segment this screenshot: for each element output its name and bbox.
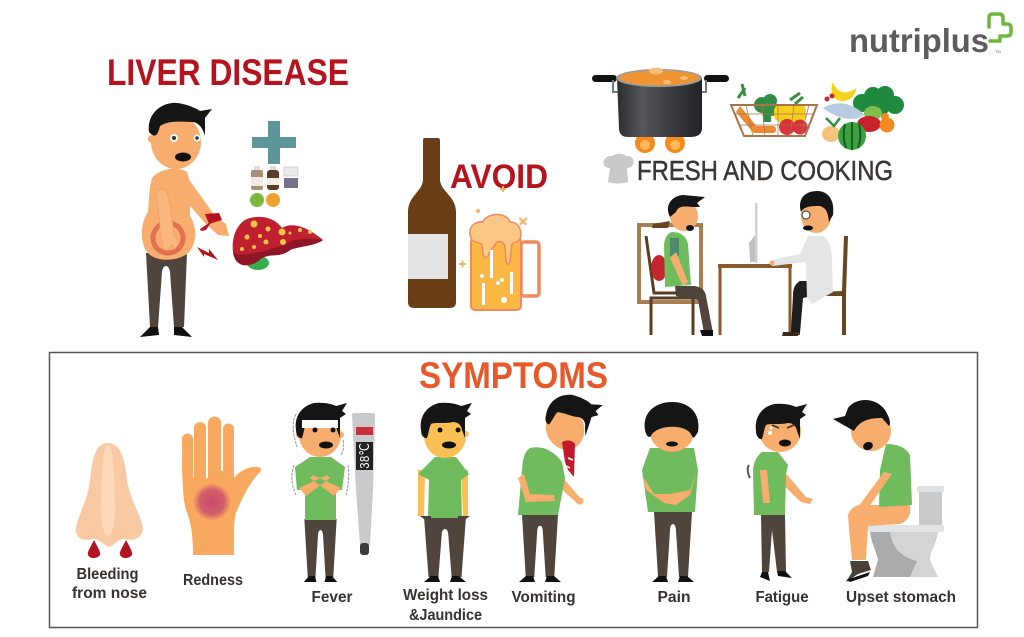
- icon: medical cross: [252, 121, 296, 164]
- symptom: redness: [182, 417, 261, 589]
- symptom: bleeding from nose: Bleeding: [76, 566, 138, 583]
- logo: nutriplus: TM: [995, 49, 1001, 54]
- icon: cooking pot on flames: [592, 68, 729, 153]
- heading: avoid: AVOID: [450, 158, 548, 196]
- symptom: fever: Fever: [312, 589, 352, 606]
- symptom: weight loss and jaundice: [403, 403, 488, 624]
- symptom: upset stomach: Upset stomach: [846, 589, 956, 606]
- symptom: bleeding from nose: from nose: [72, 585, 147, 602]
- heading: fresh and cooking: FRESH AND COOKING: [637, 155, 893, 186]
- symptom: fatigue: [748, 404, 813, 606]
- icon: beer bottle: [408, 138, 456, 308]
- title: liver disease: LIVER DISEASE: [107, 52, 349, 93]
- symptom: pain: Pain: [658, 589, 690, 606]
- icon: diseased liver: [233, 217, 323, 270]
- symptom: vomiting: Vomiting: [512, 589, 576, 606]
- symptom: vomiting: [512, 389, 603, 606]
- symptom: pain: [642, 402, 698, 606]
- illustration: desk and computer: [718, 203, 792, 335]
- symptom: bleeding from nose: [72, 443, 147, 602]
- icon: chef hat: [603, 154, 634, 184]
- icon: vegetable basket: [731, 84, 817, 136]
- icon: fresh food pile: [822, 82, 904, 150]
- symptom: upset stomach: [833, 400, 956, 606]
- symptom: weight loss and jaundice: Weight loss: [403, 587, 488, 604]
- symptom: fever: [292, 403, 375, 606]
- icon: beer mug: [459, 186, 539, 310]
- symptom: redness: Redness: [183, 572, 243, 589]
- logo: nutriplus: nutriplus: [849, 22, 989, 59]
- icon: medicines and vitamins: [250, 166, 298, 207]
- symptom: fever: 38℃: [358, 443, 374, 469]
- panel: symptoms: [50, 352, 978, 628]
- illustration: man with swollen belly: [140, 103, 229, 337]
- heading: symptoms: SYMPTOMS: [419, 355, 608, 396]
- symptom: fatigue: Fatigue: [756, 589, 809, 606]
- symptom: weight loss and jaundice: &Jaundice: [409, 607, 482, 624]
- illustration: patient on chair: [639, 195, 713, 336]
- illustration: doctor: [770, 191, 848, 336]
